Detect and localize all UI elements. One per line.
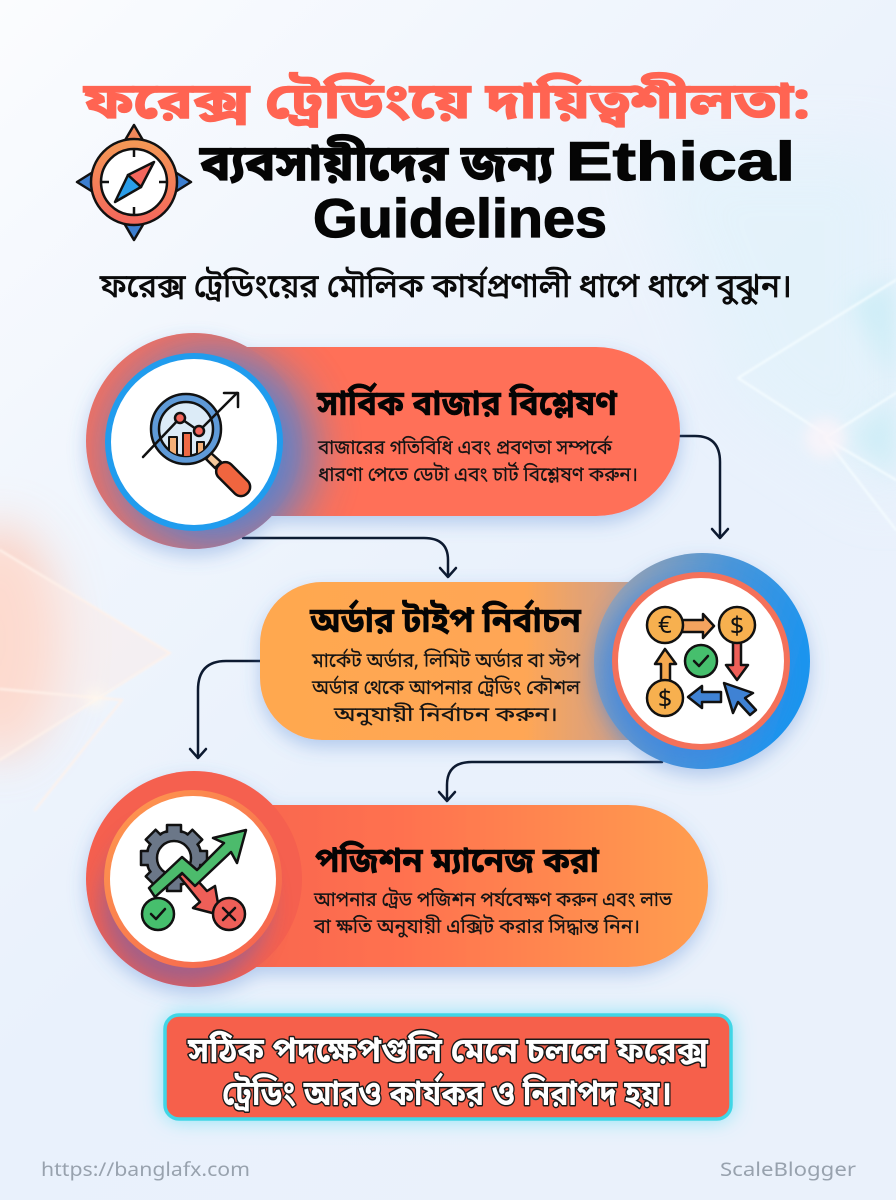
step 3 body: বা ক্ষতি অনুযায়ী এক্সিট করার সিদ্ধান্ত নিন। (313, 914, 640, 942)
title (83, 71, 810, 249)
title line 2 bengali: ব্যবসায়ীদের জন্য (199, 134, 554, 201)
icon: gear, trend arrows and outcomes (141, 825, 246, 930)
title line 2 latin: Ethical (566, 130, 795, 192)
step 3 body: আপনার ট্রেড পজিশন পর্যবেক্ষণ করুন এবং লাভ (313, 886, 673, 915)
step 1 heading: সার্বিক বাজার বিশ্লেষণ (316, 383, 618, 430)
step 1 body (317, 434, 638, 490)
title line 1: ফরেক্স ট্রেডিংয়ে দায়িত্বশীলতা: (83, 71, 810, 139)
icon: compass (77, 125, 191, 240)
step 2 body (311, 647, 581, 730)
panel: step 2 order type (260, 553, 810, 769)
step 3 body (313, 886, 673, 942)
arrow: step 1 to step 2 left (243, 538, 456, 577)
panel: step 3 position management (86, 771, 708, 987)
title line 3: Guidelines (313, 187, 607, 249)
step 2 heading: অর্ডার টাইপ নির্বাচন (309, 600, 582, 647)
arrow: step 1 to step 2 right (680, 436, 728, 538)
step 1 body: বাজারের গতিবিধি এবং প্রবণতা সম্পর্কে (317, 434, 613, 463)
callout: সঠিক পদক্ষেপগুলি মেনে চললে ফরেক্স (187, 1030, 709, 1077)
step 2 body: মার্কেট অর্ডার, লিমিট অর্ডার বা স্টপ (311, 647, 581, 676)
icon: currency exchange cycle: $ (658, 685, 672, 718)
icon: magnifier with chart (143, 393, 254, 500)
arrow: step 2 to step 3 right (439, 762, 662, 801)
step 2 body: অর্ডার থেকে আপনার ট্রেডিং কৌশল (311, 674, 580, 703)
callout: ট্রেডিং আরও কার্যকর ও নিরাপদ হয়। (222, 1073, 672, 1120)
footer left url: https://banglafx.com (41, 1159, 250, 1184)
step 2 body: অনুযায়ী নির্বাচন করুন। (333, 701, 558, 730)
step 1 body: ধারণা পেতে ডেটা এবং চার্ট বিশ্লেষণ করুন। (318, 461, 638, 490)
icon: currency exchange cycle: $ (730, 612, 744, 645)
step 3 heading: পজিশন ম্যানেজ করা (315, 840, 600, 887)
subtitle: ফরেক্স ট্রেডিংয়ের মৌলিক কার্যপ্রণালী ধাপে ধাপে বুঝুন। (99, 266, 792, 311)
icon: currency exchange cycle: € (658, 611, 672, 643)
panel: step 1 market analysis (86, 333, 680, 552)
callout (165, 1015, 731, 1120)
footer right brand: ScaleBlogger (720, 1159, 856, 1184)
arrow: step 2 to step 3 left (190, 661, 260, 758)
icon: currency exchange cycle (647, 607, 756, 718)
